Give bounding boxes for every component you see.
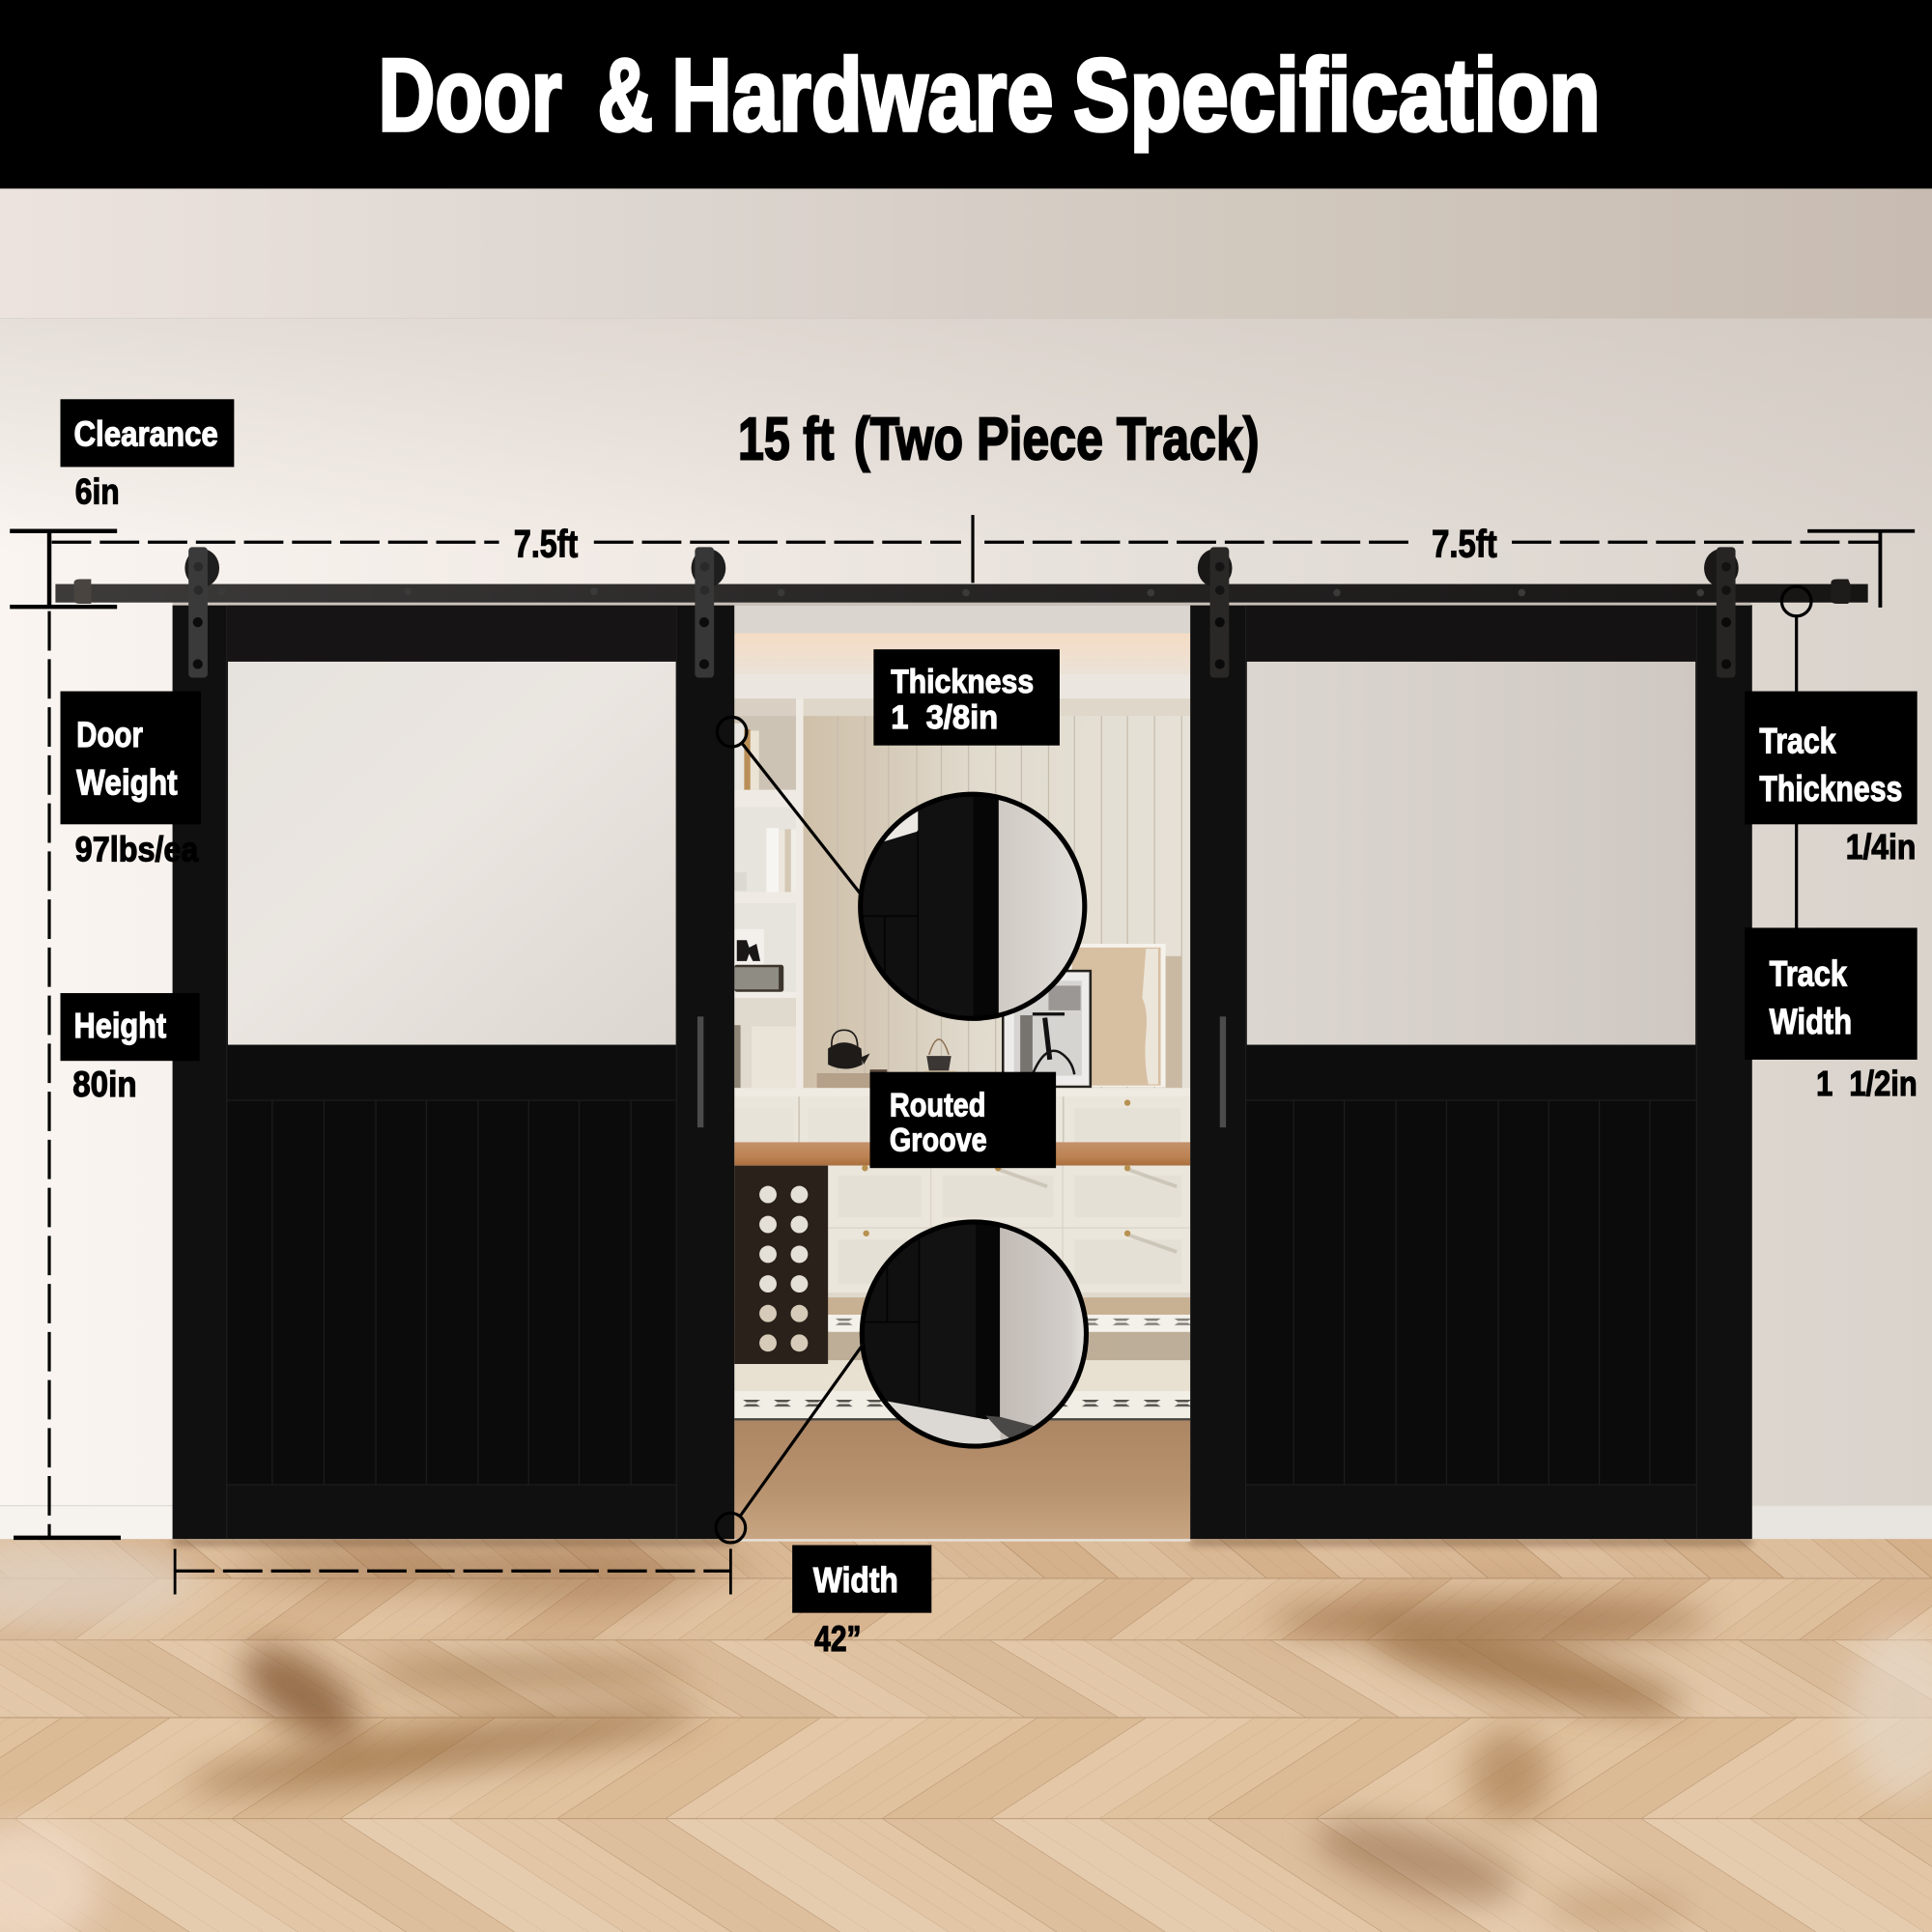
hanger strap 2 <box>692 547 725 678</box>
callout: width: Width <box>813 1561 898 1600</box>
thickness detail pointer <box>717 717 860 894</box>
left door glass panel <box>228 662 676 1045</box>
title <box>379 37 1601 153</box>
callout: clearance <box>60 399 234 512</box>
title: Hardware <box>671 37 1054 153</box>
callout: clearance: 6in <box>75 472 120 512</box>
right barn door <box>1190 605 1752 1539</box>
panelled back wall <box>804 698 1190 1088</box>
interior room seen through the doorway <box>734 605 1190 1542</box>
callout: track width <box>1745 927 1918 1103</box>
track length heading <box>738 406 1260 473</box>
callout: height: 80in <box>72 1065 137 1104</box>
title: & <box>598 37 653 153</box>
callout: clearance: Clearance <box>74 415 218 454</box>
hanger strap 4 <box>1704 547 1739 678</box>
callout: door weight: Weight <box>76 763 178 803</box>
right door handle <box>1220 1016 1226 1127</box>
callout: track thickness: 1/4in <box>1846 828 1916 867</box>
callout: thickness: 1 3/8in <box>891 699 998 736</box>
callout: door weight: 97lbs/ea <box>75 831 199 869</box>
bookshelf <box>734 698 796 1090</box>
callout: thickness: Thickness <box>891 664 1034 700</box>
callout: width <box>792 1545 931 1659</box>
callout: track thickness: Track <box>1759 721 1836 760</box>
track thickness and width pointer <box>1781 586 1811 927</box>
callout: routed groove: Groove <box>890 1122 987 1158</box>
callout: door weight: Door <box>76 715 143 754</box>
right door glass panel <box>1247 662 1695 1045</box>
white shelf upright <box>796 698 804 1095</box>
sliding track rail <box>55 579 1868 606</box>
leaning art prints <box>1002 944 1181 1088</box>
callout: track width: Width <box>1770 1002 1852 1041</box>
callout: thickness <box>873 649 1060 746</box>
header band <box>0 0 1932 188</box>
tea kettles <box>817 1030 956 1088</box>
hanger strap 1 <box>185 547 219 678</box>
cabinets and counter <box>734 1088 1190 1297</box>
door width dimension <box>175 1548 730 1595</box>
left barn door <box>173 605 734 1539</box>
callout: track thickness <box>1745 692 1918 867</box>
magnifier: door thickness detail <box>856 791 1091 1025</box>
callout: track width: Track <box>1770 953 1847 993</box>
wall and ceiling background <box>0 188 1932 1540</box>
callout: height: Height <box>74 1007 166 1045</box>
title: Specification <box>1073 37 1601 153</box>
track length heading: 15 ft <box>738 406 835 473</box>
herringbone wood floor <box>0 1539 1932 1932</box>
label: left half 7.5ft: 7.5ft <box>514 524 578 566</box>
routed groove detail pointer <box>716 1347 862 1543</box>
callout: routed groove: Routed <box>890 1088 985 1124</box>
track length heading: (Two Piece Track) <box>854 406 1260 473</box>
left door handle <box>697 1016 703 1127</box>
callout: door weight <box>60 692 201 869</box>
hanger strap 3 <box>1198 547 1233 678</box>
callout: track thickness: Thickness <box>1759 769 1902 809</box>
perforated desk panel <box>734 1166 828 1364</box>
magnifier: routed groove detail <box>859 1220 1094 1454</box>
callout: routed groove <box>870 1072 1056 1168</box>
callout: height <box>60 993 200 1104</box>
track dimension lines <box>10 515 1915 608</box>
title: Door <box>379 37 562 153</box>
label: right half 7.5ft: 7.5ft <box>1432 524 1497 566</box>
room floor and rug <box>734 1293 1190 1539</box>
callout: track width: 1 1/2in <box>1816 1065 1918 1103</box>
callout: width: 42” <box>814 1619 862 1659</box>
door height dashed line <box>14 611 121 1538</box>
